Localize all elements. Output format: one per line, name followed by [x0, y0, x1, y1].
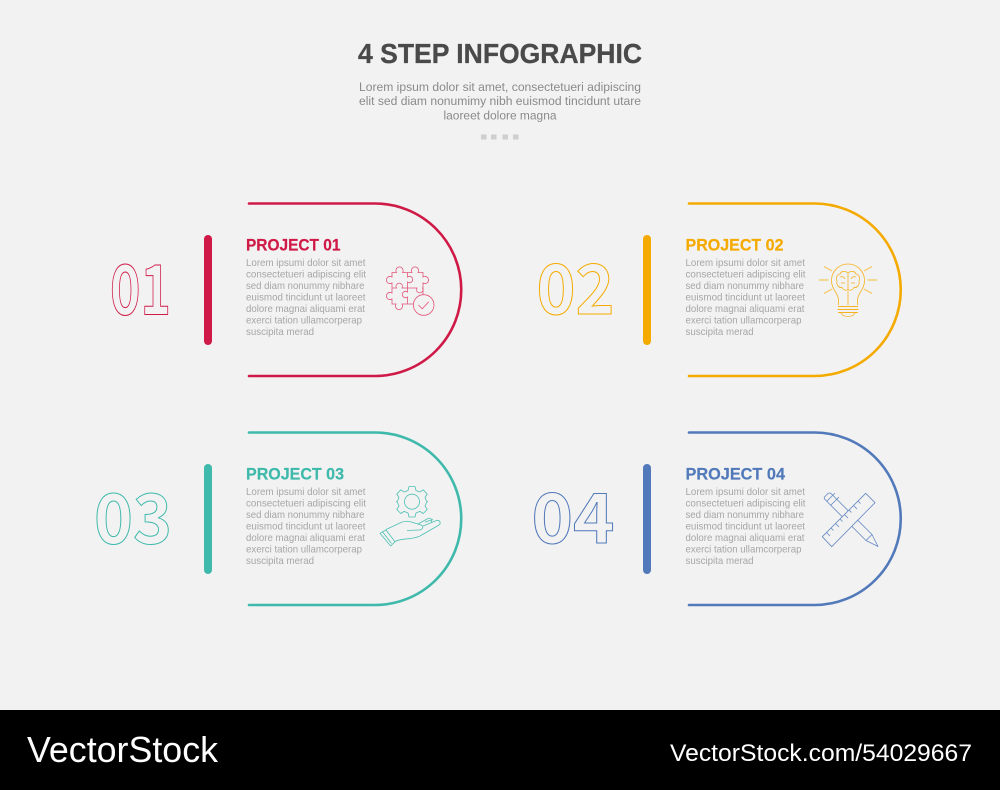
body text: suscipita merad: [246, 556, 314, 567]
subtitle text: Lorem ipsum dolor sit amet, consectetueri adipiscing: [359, 80, 641, 94]
body text: sed diam nonummy nibhare: [246, 281, 365, 292]
panel: project 02: [536, 204, 901, 376]
panel: project 01: [110, 204, 461, 376]
body text: consectetueri adipiscing elit: [246, 270, 366, 281]
pagination dots: [481, 134, 518, 140]
icon: ruler and pencil: [822, 493, 878, 547]
brand name: VectorStock: [27, 729, 219, 770]
number 03: 03: [94, 464, 172, 564]
body text: suscipita merad: [686, 327, 754, 338]
body text: dolore magnai aliquami erat: [246, 533, 365, 544]
body text: Lorem ipsumi dolor sit amet: [686, 258, 805, 269]
rounded outline: [249, 204, 461, 376]
subtitle text: [359, 80, 641, 122]
vertical bar: [204, 464, 212, 574]
subtitle text: elit sed diam nonumimy nibh euismod tincidunt utare: [359, 94, 641, 108]
body text: dolore magnai aliquami erat: [686, 304, 805, 315]
rounded outline: [689, 432, 901, 605]
body text: Lorem ipsumi dolor sit amet: [686, 487, 805, 498]
heading: PROJECT 01: [246, 236, 340, 254]
body text: consectetueri adipiscing elit: [246, 499, 366, 510]
body text: sed diam nonummy nibhare: [686, 281, 804, 292]
heading: PROJECT 02: [686, 236, 784, 254]
panel: project 03: [94, 432, 461, 605]
body text: suscipita merad: [686, 556, 754, 567]
body text: exerci tation ullamcorperap: [246, 316, 362, 327]
heading: PROJECT 04: [686, 464, 786, 484]
body text: consectetueri adipiscing elit: [686, 270, 806, 281]
number 01: 01: [110, 234, 171, 334]
body text: euismod tincidunt ut laoreet: [246, 293, 366, 304]
body text: exerci tation ullamcorperap: [686, 316, 802, 327]
title: 4 STEP INFOGRAPHIC: [358, 38, 642, 69]
body text: Lorem ipsumi dolor sit amet: [246, 258, 366, 269]
body text: [246, 487, 366, 567]
body text: exerci tation ullamcorperap: [686, 545, 802, 556]
body text: euismod tincidunt ut laoreet: [246, 522, 366, 533]
body text: [686, 487, 806, 567]
rounded outline: [689, 204, 901, 376]
image url: VectorStock.com/54029667: [670, 740, 972, 767]
body text: [686, 258, 806, 338]
subtitle text: laoreet dolore magna: [444, 108, 557, 122]
vertical bar: [643, 235, 651, 345]
body text: dolore magnai aliquami erat: [686, 533, 805, 544]
body text: consectetueri adipiscing elit: [686, 499, 806, 510]
vertical bar: [204, 235, 212, 345]
icon: light bulb with brain: [819, 264, 877, 316]
vertical bar: [643, 464, 651, 574]
panel: project 04: [532, 432, 901, 605]
body text: exerci tation ullamcorperap: [246, 545, 362, 556]
number 04: 04: [532, 463, 614, 563]
body text: [246, 258, 366, 338]
body text: dolore magnai aliquami erat: [246, 304, 365, 315]
icon: gear over hand: [380, 486, 440, 546]
body text: Lorem ipsumi dolor sit amet: [246, 487, 366, 498]
body text: sed diam nonummy nibhare: [246, 510, 365, 521]
footer: watermark band: [0, 710, 1000, 790]
rounded outline: [249, 432, 461, 605]
body text: euismod tincidunt ut laoreet: [686, 293, 805, 304]
heading: PROJECT 03: [246, 464, 344, 484]
body text: sed diam nonummy nibhare: [686, 510, 804, 521]
body text: suscipita merad: [246, 327, 314, 338]
body text: euismod tincidunt ut laoreet: [686, 522, 805, 533]
icon: puzzle with check: [386, 267, 434, 315]
number 02: 02: [536, 234, 614, 334]
